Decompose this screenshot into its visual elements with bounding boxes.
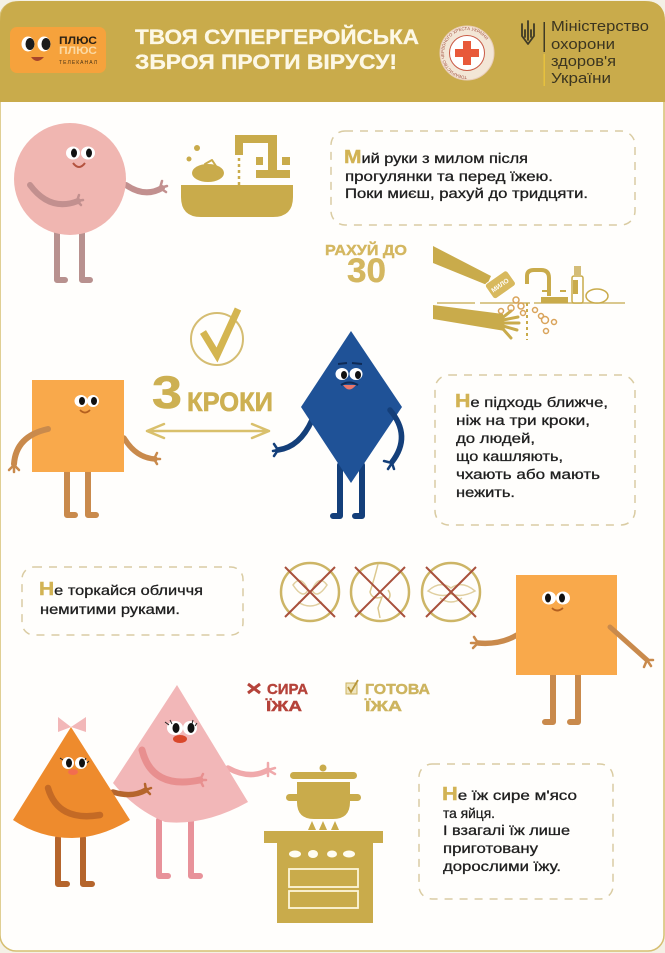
callout: wash hands: Поки миєш, рахуй до тридцяти. [345,185,588,201]
label: count to 30: 30 [347,252,386,290]
callout: keep distance: ніж на три кроки, [456,412,590,428]
callout: do not eat raw food: приготовану [443,840,538,856]
icon: hands washing with soap [433,246,625,340]
label: count to 30 [325,241,407,290]
label: 3 steps [152,367,273,418]
title: ЗБРОЯ ПРОТИ ВІРУСУ! [135,51,397,74]
label: count to 30: РАХУЙ ДО [325,241,407,259]
label: 3 steps: КРОКИ [187,387,273,417]
icon: check mark in circle [191,309,243,365]
callout: keep distance: нежить. [456,484,515,500]
icon: hands washing with soap: МИЛО [490,277,511,294]
callout: keep distance [435,375,635,525]
callout: keep distance: до людей, [456,430,535,446]
logo: Ministry of Health of Ukraine: охорони [551,37,615,53]
callout: wash hands: Мий руки з милом після [344,147,528,167]
character: orange square [9,380,160,515]
character: blue diamond [273,331,402,516]
logo: Plus Plus TV: ПЛЮС [59,35,97,47]
callout: do not eat raw food: І взагалі їж лише [443,822,570,838]
label: cooked food [346,680,431,715]
callout: do not touch face: Не торкайся обличчя [39,579,203,599]
callout: do not eat raw food: та яйця. [443,805,495,821]
label: 3 steps: 3 [152,367,182,418]
logo: Ministry of Health of Ukraine: здоров'я [551,54,616,70]
icon: do not touch nose [351,563,409,621]
callout: do not eat raw food [419,764,613,899]
callout: do not touch face: немитими руками. [40,601,180,617]
label: raw food: СИРА [267,682,309,698]
label: raw food [248,682,309,715]
label: cooked food: ГОТОВА [365,682,431,698]
logo: Plus Plus TV [10,27,106,73]
character: orange triangle daughter [13,717,151,884]
callout: do not eat raw food: Не їж сире м'ясо [442,784,577,804]
logo: Ministry of Health of Ukraine [522,19,649,87]
logo: Plus Plus TV: ПЛЮС [59,45,97,57]
callout: keep distance: Не підходь ближче, [455,391,608,411]
label: cooked food: ЇЖА [364,698,403,715]
callout: do not eat raw food: дорослими їжу. [443,858,561,874]
icon: do not touch eyes [281,563,339,621]
title: ТВОЯ СУПЕРГЕРОЙСЬКА [135,25,419,49]
callout: keep distance: що кашляють, [456,448,563,464]
icon: Red Cross emblem: ТОВАРИСТВО ЧЕРВОНОГО ХРЕСТА УКРАЇНИ [441,27,488,79]
callout: wash hands [331,131,635,225]
label: raw food: ЇЖА [265,698,303,715]
header band [0,1,665,102]
callout: do not touch face [22,567,243,635]
logo: Plus Plus TV: ТЕЛЕКАНАЛ [59,60,97,66]
callout: wash hands: прогулянки та перед їжею. [345,168,553,184]
character: pink circle [14,123,167,280]
character: orange square pointing [471,575,653,722]
title [135,25,419,74]
icon: sink with soap [181,135,293,217]
icon: do not touch mouth [422,563,480,621]
logo: Ministry of Health of Ukraine: України [551,71,611,87]
logo: Ministry of Health of Ukraine: Міністерство [551,19,649,35]
arrow: double headed distance [147,424,269,438]
callout: keep distance: чхають або мають [456,466,600,482]
character: pink triangle mother [113,685,275,876]
icon: stove with pot [264,764,383,923]
